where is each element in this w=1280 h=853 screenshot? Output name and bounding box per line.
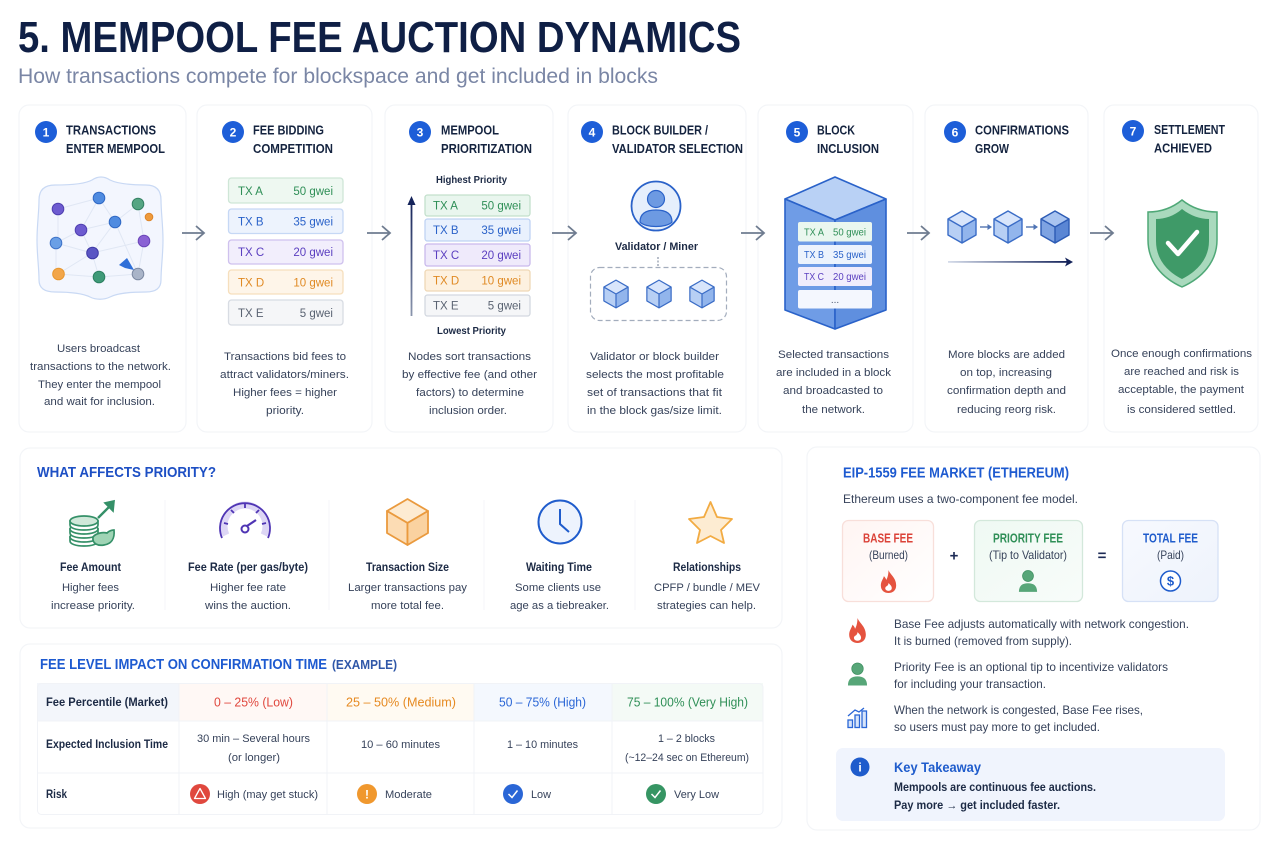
network diagram — [37, 177, 163, 299]
sorted transaction list: 35 gwei — [481, 225, 521, 237]
factor: relationships: CPFP / bundle / MEV — [654, 582, 760, 594]
step 5 heading — [817, 122, 879, 156]
factor: transaction size: more total fee. — [371, 600, 444, 612]
panel: fee level impact table — [20, 644, 782, 828]
step 5 description: the network. — [802, 404, 865, 416]
sorted transaction list: 20 gwei — [481, 250, 521, 262]
callout: key takeaway: Key Takeaway — [894, 759, 981, 775]
step 4 heading: VALIDATOR SELECTION — [612, 141, 743, 156]
factor: fee rate — [188, 503, 308, 612]
inclusion time row: (~12–24 sec on Ethereum) — [625, 752, 749, 764]
chain growth arrow — [948, 258, 1073, 266]
fee table — [37, 683, 763, 814]
step 2 heading: COMPETITION — [253, 141, 333, 156]
step 3 heading: MEMPOOL — [441, 122, 499, 138]
step 3 heading — [441, 122, 532, 156]
inclusion time row: Expected Inclusion Time — [46, 739, 168, 751]
plus sign: + — [950, 548, 959, 564]
step 7 description — [1111, 348, 1252, 416]
step 5 description: are included in a block — [776, 367, 891, 379]
inclusion time row: 30 min – Several hours — [197, 733, 310, 745]
step 4 description — [586, 351, 724, 417]
base fee box — [842, 520, 934, 602]
inclusion time row: 1 – 2 blocks — [658, 733, 715, 745]
step 5 heading: INCLUSION — [817, 141, 879, 156]
validator label: Validator / Miner — [615, 241, 699, 253]
step 2 description: attract validators/miners. — [220, 369, 349, 381]
bid list: TX C — [238, 247, 264, 259]
panel: step 2 fee bidding competition — [197, 105, 372, 432]
sorted transaction list: 50 gwei — [481, 200, 521, 212]
step 7 heading — [1154, 122, 1225, 156]
step 3 description: by effective fee (and other — [402, 369, 537, 381]
step 3 description: inclusion order. — [429, 405, 507, 417]
EIP intro: Ethereum uses a two-component fee model. — [843, 492, 1078, 506]
callout: key takeaway — [836, 748, 1225, 821]
arrow 5 to 6 — [907, 226, 929, 240]
note: base fee: Base Fee adjusts automatically with network congestion. — [894, 617, 1189, 631]
icon: info — [850, 758, 870, 776]
panel: EIP-1559 fee market — [807, 447, 1260, 830]
risk row — [46, 784, 720, 804]
block illustration — [785, 177, 886, 329]
factor: fee rate: Fee Rate (per gas/byte) — [188, 562, 308, 574]
factor: relationships: Relationships — [673, 562, 741, 574]
bid list — [228, 178, 343, 325]
panel: step 6 confirmations grow — [925, 105, 1088, 432]
risk row: Very Low — [674, 789, 720, 801]
note: base fee — [849, 617, 1189, 648]
arrow 2 to 3 — [367, 226, 390, 240]
lowest priority label: Lowest Priority — [437, 325, 506, 337]
arrow 1 to 2 — [182, 226, 204, 240]
step 6 heading: GROW — [975, 141, 1010, 156]
candidate blocks group — [590, 268, 726, 320]
sorted transaction list: TX A — [433, 200, 458, 212]
header row: 50 – 75% (High) — [499, 696, 586, 710]
total fee box — [1122, 520, 1218, 602]
icon: flame — [881, 570, 896, 593]
note: priority fee: for including your transaction. — [894, 677, 1046, 691]
sorted transaction list: TX B — [433, 225, 459, 237]
step 1 number badge: 1 — [43, 126, 50, 140]
factor: fee amount — [51, 501, 135, 612]
step 4 number badge: 4 — [589, 126, 596, 140]
block chain illustration — [948, 211, 1069, 243]
header row: 0 – 25% (Low) — [214, 696, 293, 710]
sorted transaction list: 10 gwei — [481, 276, 521, 288]
step 7 description: are reached and risk is — [1124, 366, 1239, 378]
subtitle: How transactions compete for blockspace and get included in blocks — [18, 65, 658, 88]
step 5 description — [776, 349, 891, 416]
priority fee box — [974, 520, 1082, 602]
step 6 number badge — [944, 121, 966, 143]
icon: coins with arrow — [70, 501, 114, 546]
table heading: FEE LEVEL IMPACT ON CONFIRMATION TIME — [40, 657, 327, 673]
base fee box: (Burned) — [869, 548, 908, 562]
dashed connector — [657, 257, 659, 266]
inclusion time row — [46, 733, 749, 764]
factor: fee amount: Fee Amount — [60, 562, 121, 574]
step 1 description — [30, 343, 171, 408]
equals sign: = — [1098, 548, 1107, 564]
note: congestion: When the network is congested, Base Fee rises, — [894, 703, 1143, 717]
note: priority fee — [848, 660, 1168, 691]
bid list: TX B — [238, 216, 264, 228]
panel: step 1 transactions enter mempool — [19, 105, 186, 432]
step 5 description: and broadcasted to — [783, 385, 883, 397]
header row: 25 – 50% (Medium) — [346, 696, 456, 710]
risk row: High (may get stuck) — [217, 789, 318, 801]
block illustration: TX B — [804, 249, 824, 261]
bid list: 20 gwei — [293, 247, 333, 259]
icon: person — [1019, 571, 1037, 592]
step 4 description: in the block gas/size limit. — [587, 405, 722, 417]
step 7 description: Once enough confirmations — [1111, 348, 1252, 360]
risk row: Risk — [46, 789, 68, 801]
priority heading: WHAT AFFECTS PRIORITY? — [37, 464, 216, 481]
table heading: (EXAMPLE) — [332, 658, 397, 672]
block illustration: 35 gwei — [833, 249, 866, 261]
bid list: 35 gwei — [293, 216, 333, 228]
header row: 75 – 100% (Very High) — [627, 696, 748, 710]
step 7 number badge — [1122, 120, 1144, 142]
factor: relationships: strategies can help. — [657, 600, 756, 612]
factor: relationships — [654, 502, 760, 612]
step 7 heading: ACHIEVED — [1154, 140, 1212, 156]
step 4 heading — [612, 122, 743, 156]
step 4 description: Validator or block builder — [590, 351, 719, 363]
icon: clock — [538, 500, 582, 544]
step 6 description: More blocks are added — [948, 349, 1065, 361]
factor: fee rate: Higher fee rate — [210, 582, 286, 594]
step 5 number badge: 5 — [794, 126, 801, 140]
factor: fee amount: Higher fees — [62, 582, 119, 594]
step 4 description: set of transactions that fit — [587, 387, 723, 399]
block illustration: TX C — [804, 271, 824, 283]
step 2 number badge — [222, 121, 244, 143]
block illustration: 20 gwei — [833, 271, 866, 283]
header row — [46, 696, 748, 710]
note: congestion: so users must pay more to get included. — [894, 720, 1100, 734]
step 3 number badge: 3 — [417, 126, 424, 140]
inclusion time row: (or longer) — [228, 752, 280, 764]
step 4 number badge — [581, 121, 603, 143]
total fee box: TOTAL FEE — [1143, 530, 1198, 546]
icon: info: i — [858, 760, 862, 774]
step 1 heading: TRANSACTIONS — [66, 122, 156, 138]
step 1 description: They enter the mempool — [38, 379, 161, 391]
sorted transaction list: 5 gwei — [488, 300, 521, 312]
block illustration: ... — [831, 295, 839, 306]
step 2 description: Higher fees = higher — [233, 387, 337, 399]
title: 5. MEMPOOL FEE AUCTION DYNAMICS — [18, 13, 741, 62]
step 2 description: priority. — [266, 405, 304, 417]
factor: fee amount: increase priority. — [51, 600, 135, 612]
note: congestion — [848, 703, 1143, 734]
arrow 4 to 5 — [741, 226, 764, 240]
step 7 heading: SETTLEMENT — [1154, 122, 1225, 137]
panel: step 7 settlement achieved — [1104, 105, 1258, 432]
arrow 3 to 4 — [552, 226, 576, 240]
step 1 description: transactions to the network. — [30, 361, 171, 373]
base fee box: BASE FEE — [863, 530, 913, 546]
factor: waiting time: Some clients use — [515, 582, 601, 594]
step 3 description: factors) to determine — [416, 387, 524, 399]
step 1 number badge — [35, 121, 57, 143]
step 7 number badge: 7 — [1130, 124, 1137, 138]
EIP heading: EIP-1559 FEE MARKET (ETHEREUM) — [843, 464, 1069, 482]
callout: key takeaway: Mempools are continuous fee auctions. — [894, 782, 1096, 794]
step 1 description: and wait for inclusion. — [44, 396, 155, 408]
step 5 description: Selected transactions — [778, 349, 889, 361]
header row: Fee Percentile (Market) — [46, 697, 168, 709]
panel: what affects priority — [20, 448, 782, 628]
icon: dollar: $ — [1167, 574, 1175, 588]
step 2 number badge: 2 — [230, 126, 237, 140]
panel: step 4 block builder — [568, 105, 746, 432]
step 4 description: selects the most profitable — [586, 369, 724, 381]
step 5 heading: BLOCK — [817, 122, 856, 138]
step 6 description: reducing reorg risk. — [957, 404, 1056, 416]
step 2 description: Transactions bid fees to — [224, 351, 346, 363]
step 7 description: is considered settled. — [1127, 404, 1236, 416]
callout: key takeaway: Pay more → get included faster. — [894, 800, 1060, 812]
step 1 heading — [66, 122, 165, 156]
bid list: 5 gwei — [300, 308, 333, 320]
step 7 description: acceptable, the payment — [1118, 384, 1245, 396]
step 6 number badge: 6 — [952, 126, 959, 140]
factor: waiting time: Waiting Time — [526, 562, 592, 574]
risk row: Low — [531, 789, 552, 801]
inclusion time row: 1 – 10 minutes — [507, 739, 578, 751]
step 6 description — [947, 349, 1066, 416]
factor: waiting time — [510, 500, 609, 612]
step 2 heading: FEE BIDDING — [253, 122, 324, 138]
icon: box — [387, 499, 428, 545]
sorted transaction list: TX E — [433, 300, 459, 312]
step 3 description: Nodes sort transactions — [408, 351, 531, 363]
priority fee box: (Tip to Validator) — [989, 548, 1067, 562]
block illustration: TX A — [804, 226, 824, 238]
sorted transaction list: TX D — [433, 276, 459, 288]
bid list: TX D — [238, 278, 264, 290]
bid list: 10 gwei — [293, 278, 333, 290]
priority fee box: PRIORITY FEE — [993, 530, 1063, 546]
block illustration: 50 gwei — [833, 226, 866, 238]
step 3 heading: PRIORITIZATION — [441, 141, 532, 156]
step 6 description: on top, increasing — [960, 367, 1052, 379]
step 4 heading: BLOCK BUILDER / — [612, 122, 708, 138]
icon: star — [689, 502, 732, 543]
step 3 description — [402, 351, 537, 417]
factor: transaction size: Transaction Size — [366, 562, 449, 574]
step 2 heading — [253, 122, 333, 156]
bid list: 50 gwei — [293, 186, 333, 198]
step 3 number badge — [409, 121, 431, 143]
factor: waiting time: age as a tiebreaker. — [510, 600, 609, 612]
step 1 description: Users broadcast — [57, 343, 141, 355]
step 1 heading: ENTER MEMPOOL — [66, 141, 165, 156]
note: priority fee: Priority Fee is an optional tip to incentivize validators — [894, 660, 1168, 674]
highest priority label: Highest Priority — [436, 174, 507, 186]
note: base fee: It is burned (removed from supply). — [894, 634, 1072, 648]
step 6 heading: CONFIRMATIONS — [975, 122, 1069, 138]
step 6 description: confirmation depth and — [947, 385, 1066, 397]
panel: step 5 block inclusion — [758, 105, 913, 432]
bid list: TX E — [238, 308, 264, 320]
priority arrow — [408, 196, 416, 316]
icon: gauge — [220, 503, 270, 538]
sorted transaction list — [425, 195, 530, 316]
icon: validator person — [632, 182, 680, 230]
factor: transaction size: Larger transactions pay — [348, 582, 467, 594]
inclusion time row: 10 – 60 minutes — [361, 739, 440, 751]
sorted transaction list: TX C — [433, 250, 459, 262]
step 5 number badge — [786, 121, 808, 143]
factor: fee rate: wins the auction. — [204, 600, 291, 612]
icon: shield with check — [1148, 200, 1217, 287]
panel: step 3 mempool prioritization — [385, 105, 553, 432]
bid list: TX A — [238, 186, 263, 198]
step 2 description — [220, 351, 349, 417]
step 6 heading — [975, 122, 1069, 156]
arrow 6 to 7 — [1090, 226, 1113, 240]
risk row: Moderate — [385, 789, 432, 801]
risk row: ! — [365, 788, 369, 802]
total fee box: (Paid) — [1157, 548, 1184, 562]
factor: transaction size — [348, 499, 467, 612]
